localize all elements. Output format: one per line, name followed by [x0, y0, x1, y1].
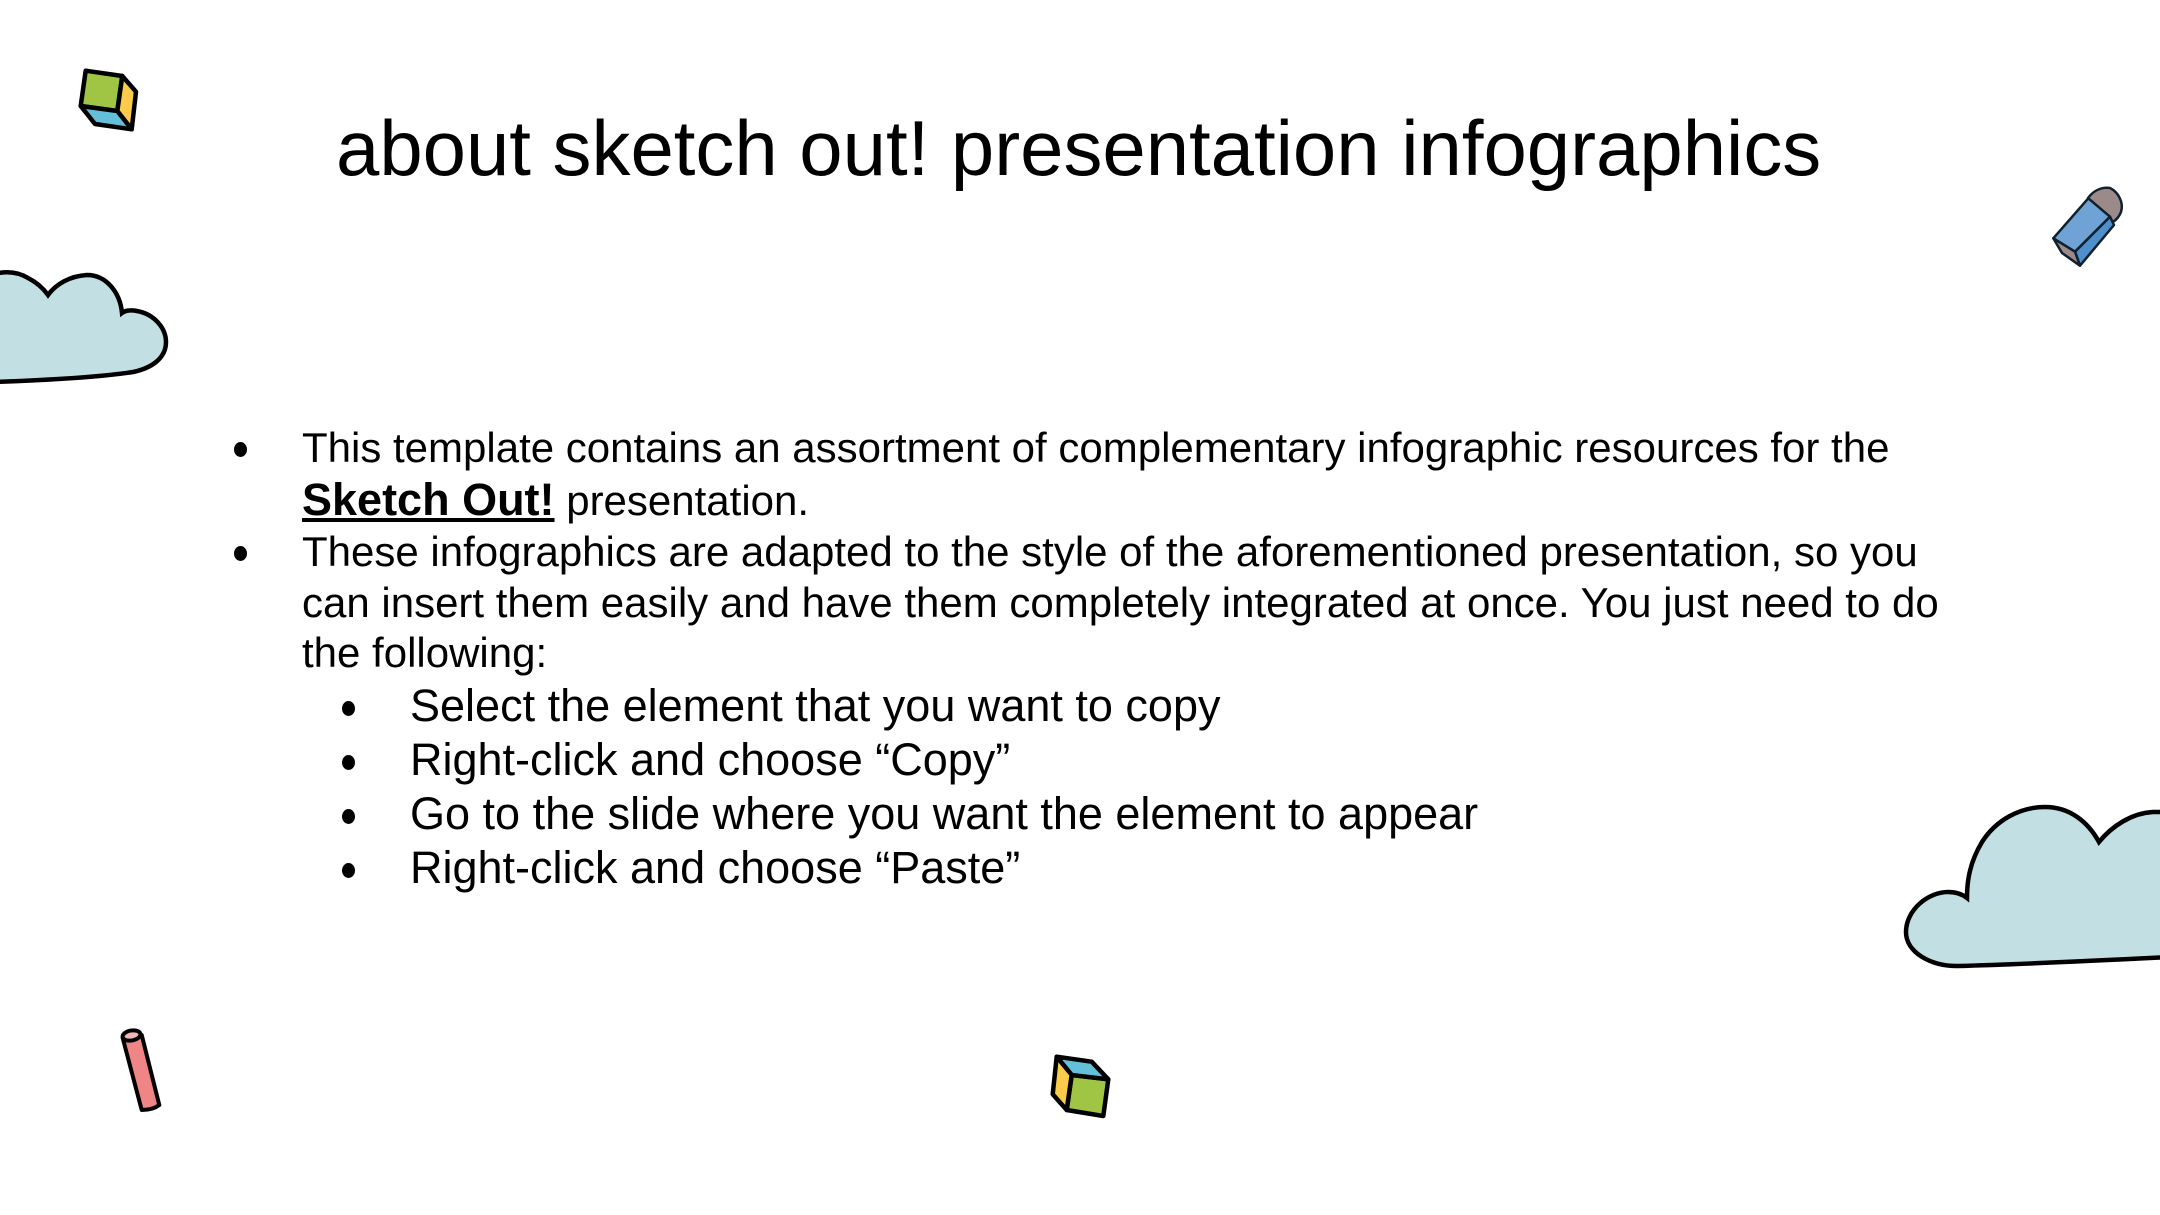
bullet list — [234, 424, 1939, 893]
list text and markers: Go to the slide where you want the element to appear — [410, 788, 1478, 839]
list text and markers: Sketch Out! presentation. — [302, 474, 809, 525]
list text and markers: the following: — [302, 629, 547, 676]
list text and markers: Right-click and choose “Paste” — [410, 842, 1020, 893]
list text and markers: This template contains an assortment of complementary infographic resources for the — [302, 424, 1889, 471]
icon: bottom cube — [1053, 1057, 1108, 1116]
list text and markers: These infographics are adapted to the style of the aforementioned presentation, so you — [302, 528, 1918, 575]
icon: eraser — [2053, 188, 2122, 266]
icon: right cloud — [1906, 807, 2160, 966]
title: about sketch out! presentation infographics — [336, 104, 1821, 192]
list text and markers: can insert them easily and have them completely integrated at once. You just need to do — [302, 579, 1939, 626]
icon: left cloud — [0, 272, 166, 382]
list text and markers: Select the element that you want to copy — [410, 680, 1220, 731]
list text and markers: Right-click and choose “Copy” — [410, 734, 1010, 785]
icon: top-left cube — [81, 71, 136, 129]
icon: chalk — [122, 1029, 159, 1110]
